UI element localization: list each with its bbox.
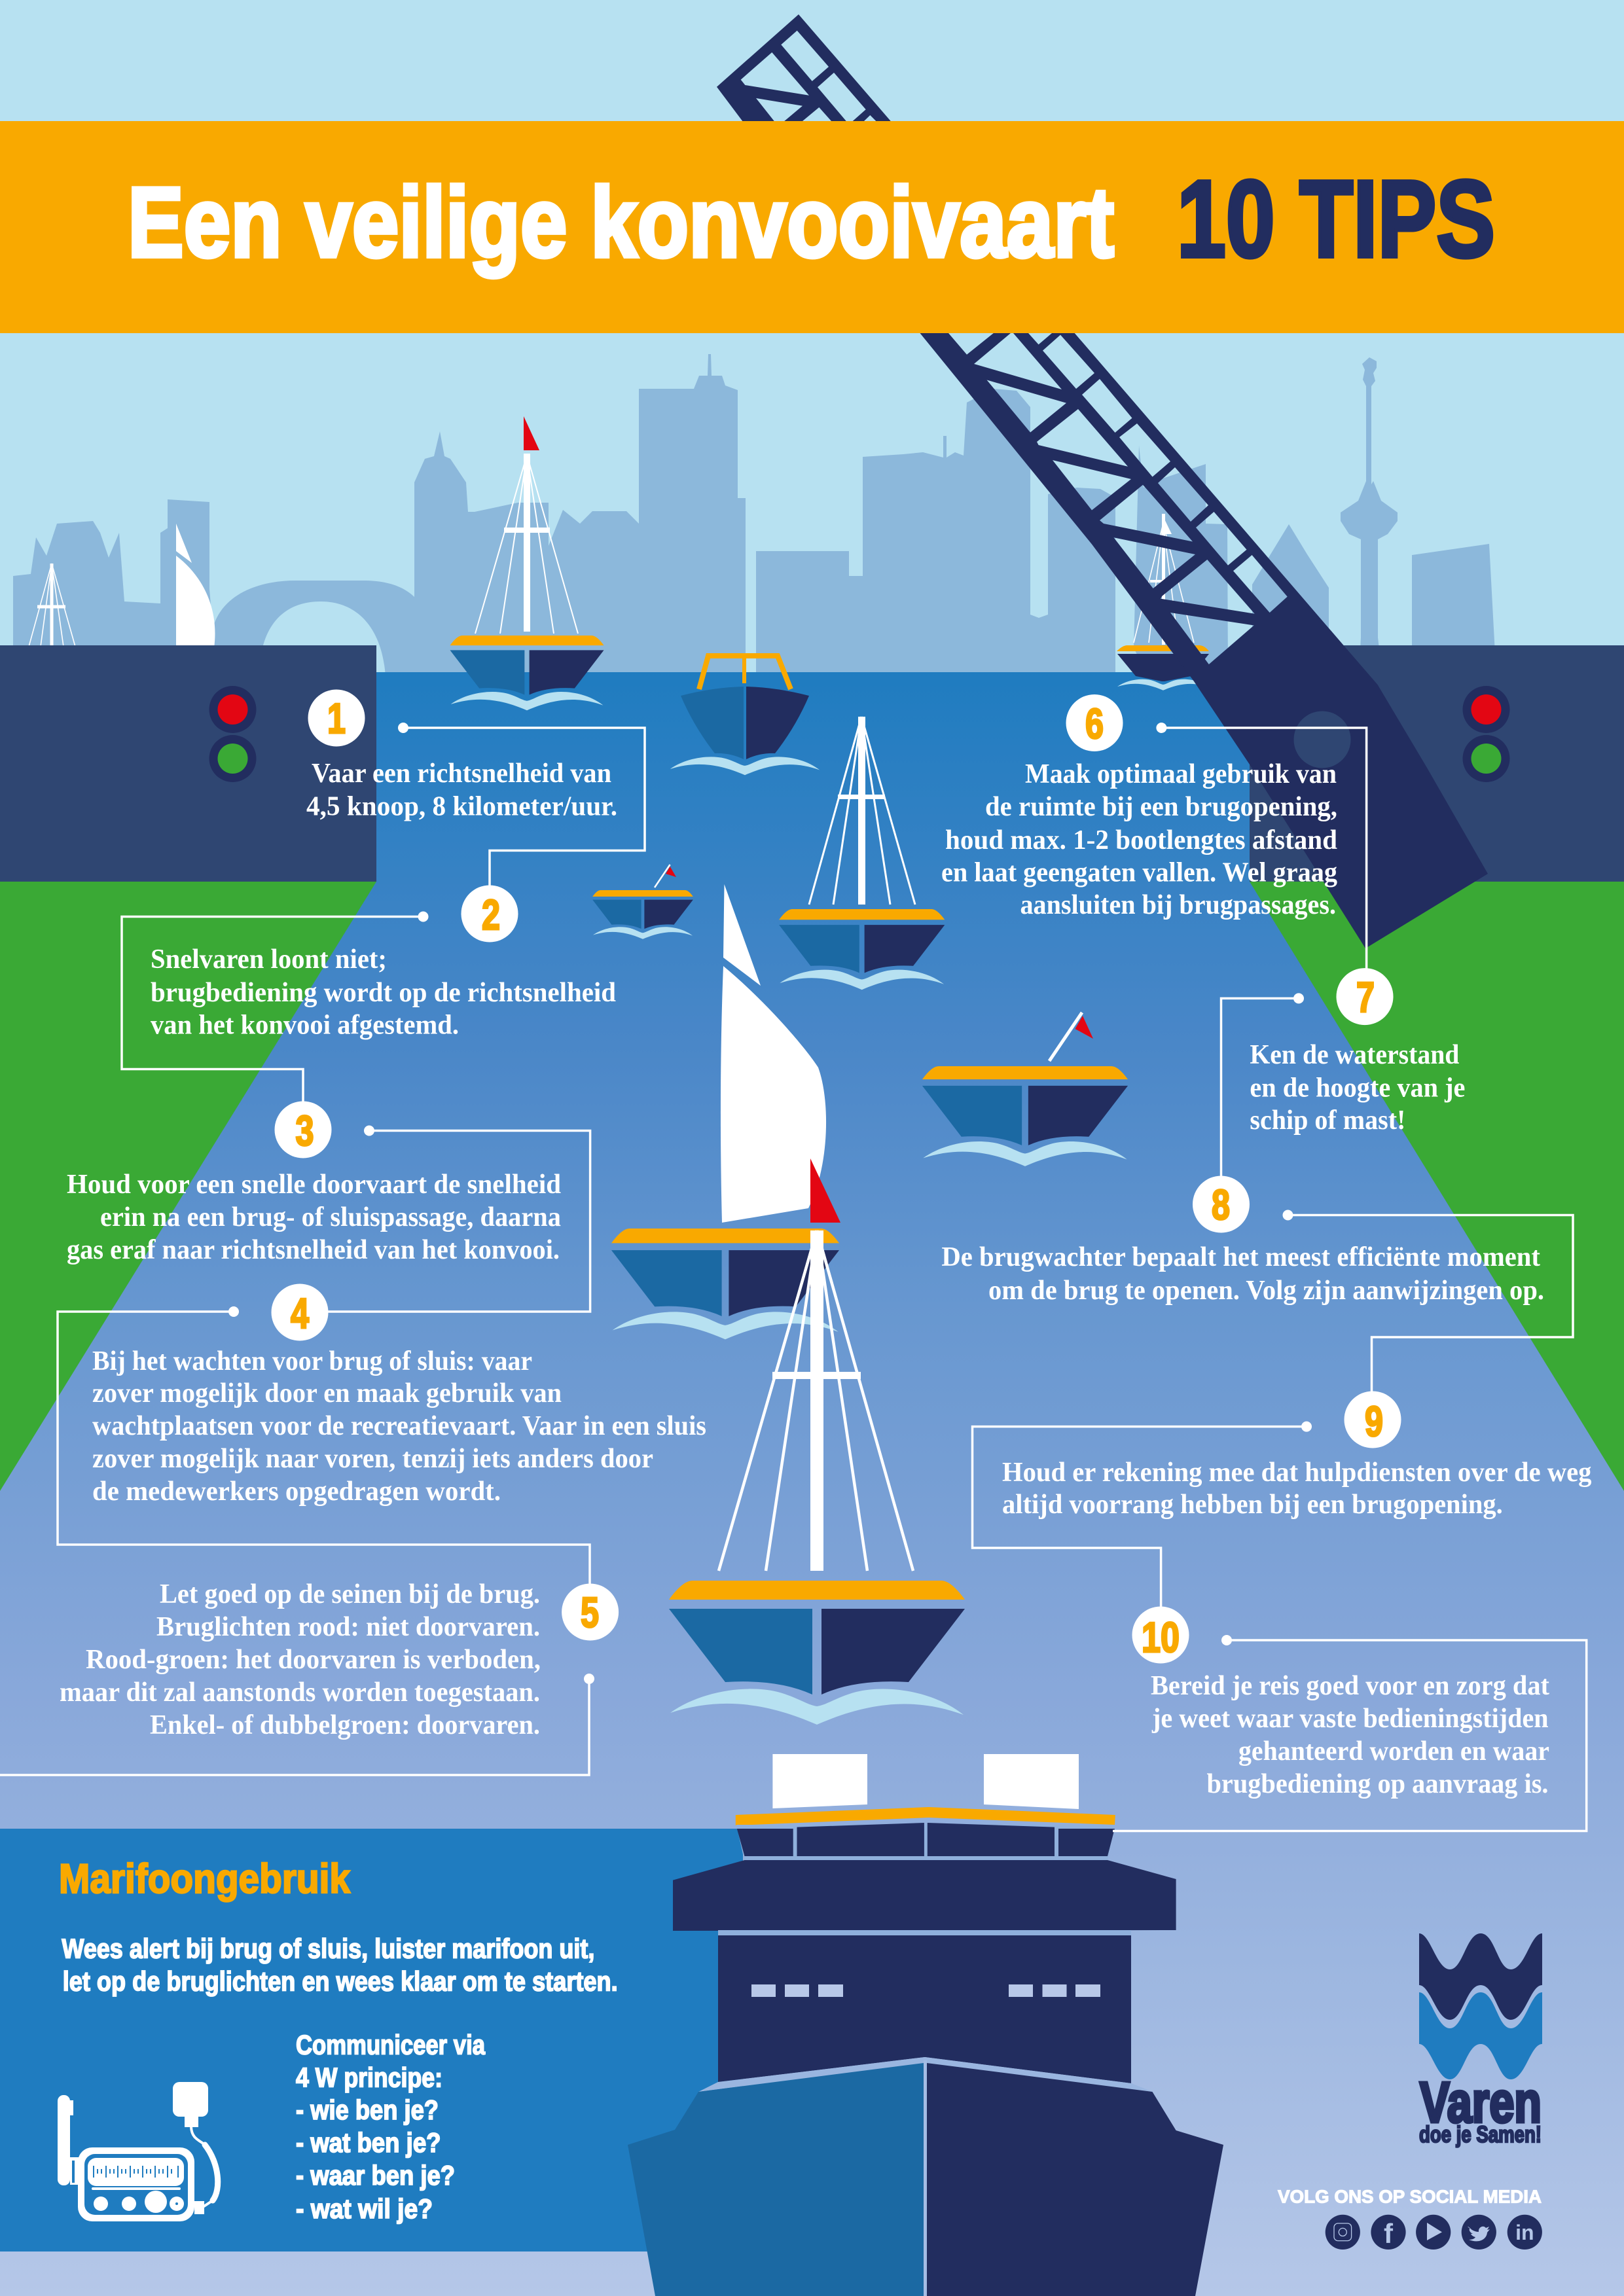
social media heading: VOLG ONS OP SOCIAL MEDIA <box>1278 2187 1542 2207</box>
bascule bridge lower section <box>920 333 1488 948</box>
badge 7: 7 <box>1356 973 1375 1021</box>
large ship bow <box>628 1754 1223 2296</box>
sailboat middle <box>779 717 945 990</box>
bridge abutment right <box>1250 645 1624 882</box>
connector 9 to 10 <box>973 1422 1312 1635</box>
badge 7 <box>1337 968 1393 1025</box>
badge 3: 3 <box>296 1107 314 1155</box>
marifoon 4 W list <box>296 2030 486 2224</box>
connector 5 to edge <box>0 1674 594 1775</box>
tip 1 text: Vaar een richtsnelheid van <box>312 759 611 789</box>
large white sail boat <box>611 884 839 1339</box>
tip 6 text: de ruimte bij een brugopening, <box>985 792 1337 822</box>
logo: wordmark: doe je Samen! <box>1419 2122 1542 2147</box>
tip 2 text: Snelvaren loont niet; <box>151 944 387 975</box>
tip 6 text: en laat geengaten vallen. Wel graag <box>941 857 1337 888</box>
city skyline <box>13 354 1496 677</box>
sky background <box>0 0 1624 681</box>
badge 1: 1 <box>327 694 346 742</box>
icon: facebook <box>1371 2215 1406 2250</box>
tip 8 text: om de brug te openen. Volg zijn aanwijzingen op. <box>988 1276 1544 1306</box>
marifoon 4 W list: - wat ben je? <box>296 2127 441 2158</box>
ship tower <box>718 1935 1131 2083</box>
tip 2 text: van het konvooi afgestemd. <box>151 1011 459 1041</box>
icon: twitter <box>1462 2215 1496 2250</box>
small boat with flag <box>592 865 693 939</box>
connector 6 to 7 <box>1156 723 1367 996</box>
icon: linkedin: in <box>1515 2221 1534 2244</box>
distant boat behind bridge <box>1117 514 1209 691</box>
tip 6 text: Maak optimaal gebruik van <box>1025 759 1337 789</box>
tip 8 text <box>941 1242 1544 1306</box>
tip 10 text <box>1151 1671 1549 1799</box>
tip 10 text: je weet waar vaste bedieningstijden <box>1151 1704 1549 1734</box>
tip 3 text: Houd voor een snelle doorvaart de snelheid <box>67 1170 561 1200</box>
logo: wordmark <box>1419 2071 1542 2147</box>
title: Een veilige konvooivaart <box>128 167 1114 278</box>
boat with flag right <box>922 1013 1128 1166</box>
marifoon 4 W list: 4 W principe: <box>296 2062 442 2093</box>
tip 4 text: zover mogelijk naar voren, tenzij iets anders door <box>92 1444 653 1474</box>
ship white windows <box>772 1754 1079 1809</box>
connector 4 to 5 <box>58 1306 590 1612</box>
badge 5: 5 <box>581 1588 599 1636</box>
ship hull left <box>628 2063 924 2296</box>
sailboat upper left <box>450 416 604 710</box>
tip 6 text <box>941 759 1337 920</box>
connector 8 to 9 <box>1283 1210 1573 1420</box>
badge 10 <box>1132 1606 1189 1664</box>
ship portholes <box>751 1984 1100 1997</box>
tip 4 text: de medewerkers opgedragen wordt. <box>92 1477 501 1507</box>
tip 4 text <box>92 1346 706 1507</box>
ship deck <box>673 1860 1176 1931</box>
tip 4 text: Bij het wachten voor brug of sluis: vaar <box>92 1346 532 1376</box>
tip 2 text <box>151 944 616 1041</box>
bridge abutment left <box>0 645 376 882</box>
tip 7 text: en de hoogte van je <box>1250 1073 1465 1103</box>
badge 5 <box>562 1584 619 1640</box>
motor boat <box>670 656 820 775</box>
badge 2: 2 <box>482 891 500 939</box>
marifoon 4 W list: - wat wil je? <box>296 2193 433 2224</box>
marifoon 4 W list: Communiceer via <box>296 2030 486 2060</box>
title banner <box>0 121 1624 333</box>
connector 10 to ship <box>1113 1635 1587 1831</box>
tip 4 text: wachtplaatsen voor de recreatievaart. Vaar in een sluis <box>92 1411 706 1441</box>
badge 9: 9 <box>1365 1397 1383 1445</box>
badge 6: 6 <box>1085 700 1104 747</box>
badge 1 <box>308 690 365 746</box>
tip 9 text <box>1002 1458 1592 1520</box>
badge 10: 10 <box>1142 1613 1180 1661</box>
badge 4 <box>271 1284 329 1340</box>
badge 8: 8 <box>1212 1181 1230 1229</box>
tip 7 text: Ken de waterstand <box>1250 1040 1459 1070</box>
badge 9 <box>1344 1391 1401 1448</box>
tip 5 text: Rood-groen: het doorvaren is verboden, <box>86 1645 541 1675</box>
badge 4: 4 <box>291 1289 309 1337</box>
icon: facebook: f <box>1384 2218 1394 2249</box>
tip 6 text: houd max. 1-2 bootlengtes afstand <box>945 825 1337 855</box>
connector 7 to 8 <box>1221 993 1304 1204</box>
large sailboat foreground <box>669 1158 965 1725</box>
tip 5 text: Bruglichten rood: niet doorvaren. <box>156 1612 540 1642</box>
tip 10 text: Bereid je reis goed voor en zorg dat <box>1151 1671 1549 1701</box>
tip 5 text: Let goed op de seinen bij de brug. <box>160 1579 540 1609</box>
tip 7 text: schip of mast! <box>1250 1105 1405 1136</box>
bridge hinge circle <box>1293 711 1351 768</box>
tip 3 text: erin na een brug- of sluispassage, daarna <box>100 1202 561 1232</box>
tip 1 text <box>306 759 617 822</box>
traffic light right <box>1462 686 1509 782</box>
ship bridge windows <box>737 1823 1115 1856</box>
tip 8 text: De brugwachter bepaalt het meest efficiënte moment <box>941 1242 1540 1272</box>
water gradient <box>0 672 1624 2296</box>
badge 2 <box>461 885 518 942</box>
tip 3 text: gas eraf naar richtsnelheid van het konvooi. <box>67 1235 560 1265</box>
tip 5 text: maar dit zal aanstonds worden toegestaan. <box>60 1677 540 1708</box>
tip 2 text: brugbediening wordt op de richtsnelheid <box>151 978 616 1008</box>
river banks green right <box>1250 882 1624 1491</box>
connector 3 to 4 <box>300 1126 590 1312</box>
marifoon 4 W list: - waar ben je? <box>296 2160 455 2191</box>
icon: linkedin <box>1507 2215 1542 2250</box>
badge 8 <box>1193 1175 1250 1233</box>
connector 1 to 2 <box>398 723 645 914</box>
tip 1 text: 4,5 knoop, 8 kilometer/uur. <box>306 792 617 822</box>
traffic light left <box>209 686 257 782</box>
marifoon heading: Marifoongebruik <box>59 1856 351 1902</box>
river banks green left <box>0 882 376 1491</box>
icon: youtube play <box>1416 2215 1451 2250</box>
marifoon intro text: let op de bruglichten en wees klaar om te starten. <box>63 1966 618 1996</box>
tip 9 text: Houd er rekening mee dat hulpdiensten over de weg <box>1002 1458 1592 1488</box>
ship hull right <box>927 2063 1223 2296</box>
tip 5 text <box>60 1579 541 1740</box>
logo: waves <box>1419 1933 1542 2079</box>
title: 10 tips: 10 TIPS <box>1177 158 1495 280</box>
tip 10 text: brugbediening op aanvraag is. <box>1207 1769 1549 1799</box>
badge 3 <box>275 1101 331 1158</box>
ship bridge roof <box>736 1807 1115 1825</box>
icon: marine radio <box>58 2082 218 2221</box>
tip 10 text: gehanteerd worden en waar <box>1238 1736 1549 1767</box>
tip 5 text: Enkel- of dubbelgroen: doorvaren. <box>150 1710 540 1740</box>
tip 7 text <box>1250 1040 1465 1136</box>
icon: instagram <box>1326 2215 1360 2250</box>
tip 3 text <box>67 1170 561 1265</box>
bascule bridge top section <box>717 14 893 124</box>
marifoon panel <box>0 1829 743 2251</box>
marifoon intro text <box>62 1933 618 1996</box>
distant sailboat far left <box>29 524 215 648</box>
connector 2 to 3 <box>122 911 428 1130</box>
tip 9 text: altijd voorrang hebben bij een brugopening. <box>1002 1490 1503 1520</box>
logo: wordmark: Varen <box>1420 2071 1542 2134</box>
tip 4 text: zover mogelijk door en maak gebruik van <box>92 1378 562 1408</box>
marifoon intro text: Wees alert bij brug of sluis, luister marifoon uit, <box>62 1933 594 1964</box>
marifoon 4 W list: - wie ben je? <box>296 2094 439 2125</box>
tip 6 text: aansluiten bij brugpassages. <box>1020 890 1336 920</box>
badge 6 <box>1066 694 1123 751</box>
